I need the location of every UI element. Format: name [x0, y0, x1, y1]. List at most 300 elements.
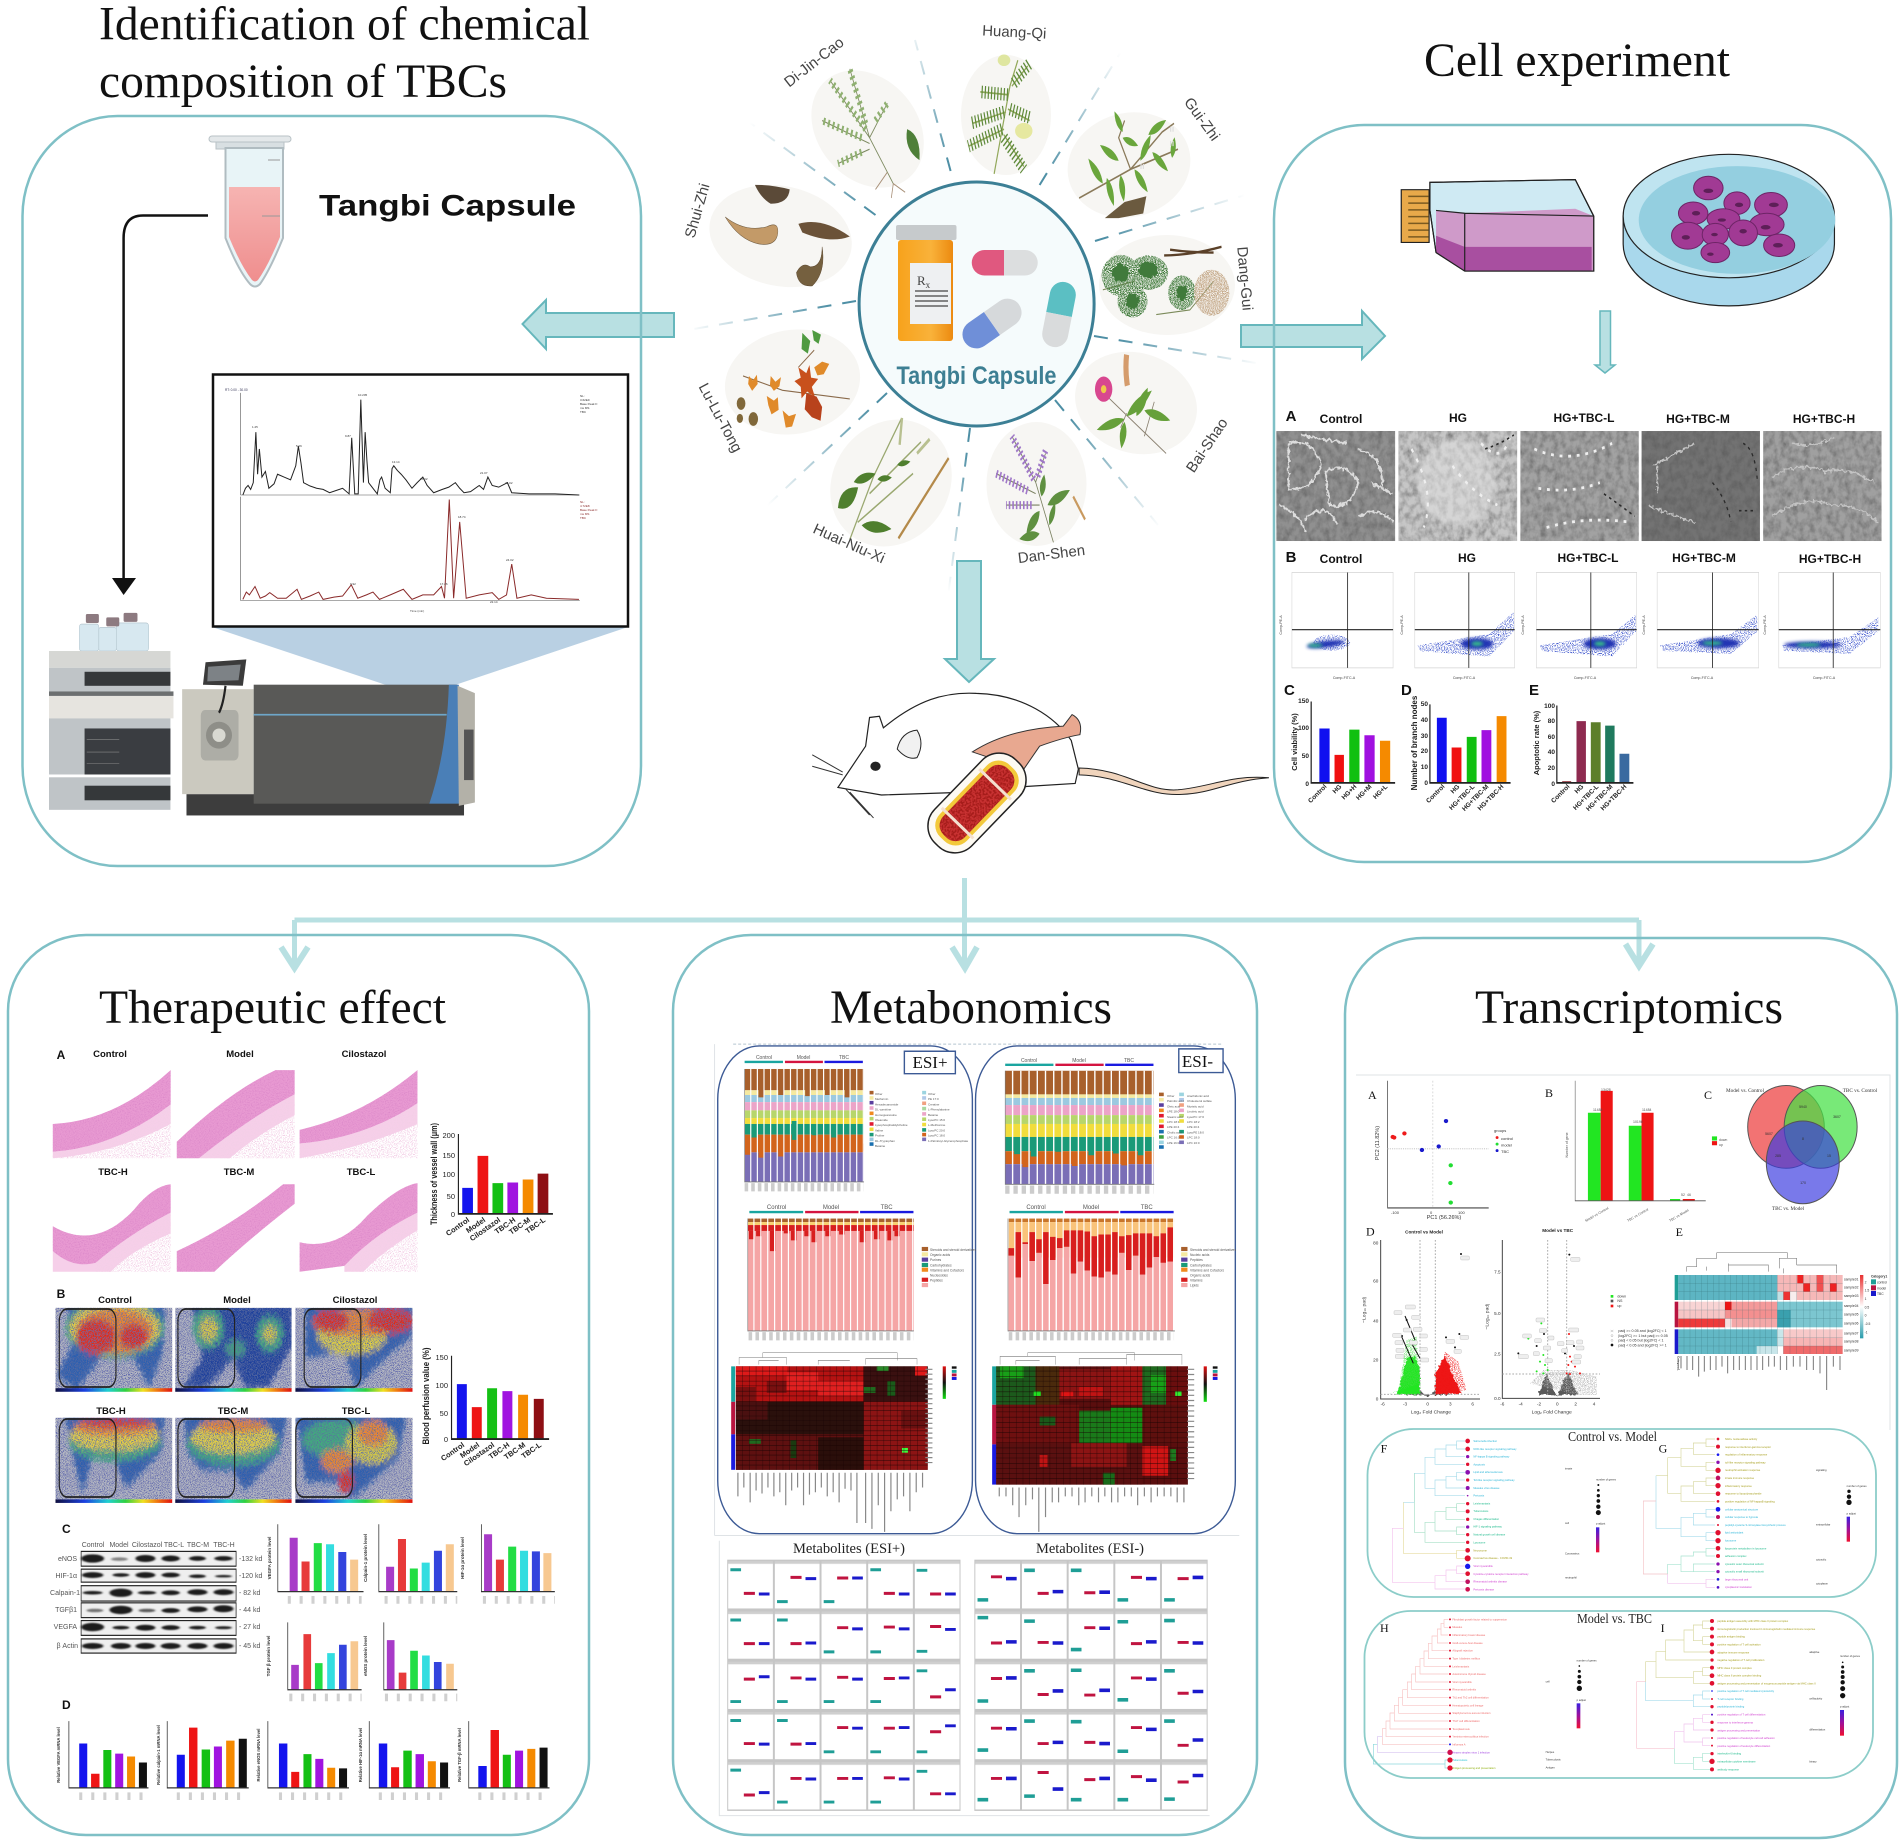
herb labels: Shui-Zhi	[682, 182, 714, 240]
heatmap: gene expression: sample06	[1844, 1321, 1859, 1325]
legend text: ESI+ metabolites: Oleamide	[875, 1118, 888, 1122]
chart C: cell viability: HG+M	[1355, 783, 1373, 802]
legend text: ESI+ metabolites: TBC	[839, 1055, 849, 1061]
panel A headings: HG+TBC-M	[1666, 412, 1730, 426]
legend text: ESI- metabolites: Oleic acid	[1167, 1104, 1181, 1108]
legend text: ESI- metabolites: Stearic acid	[1167, 1115, 1183, 1119]
chart: PCA: groups	[1494, 1128, 1506, 1133]
legend text: ESI- metabolites: Other	[1167, 1094, 1175, 1098]
chart: chromatogram: 9.92	[350, 582, 356, 586]
tree G: lipid antioxidant	[1725, 1531, 1744, 1535]
tree I: antigen processing and presentation of exogenous peptide antigen via MHC class II	[1717, 1682, 1816, 1686]
title: identification of chemical composition: Identification of chemical	[99, 0, 590, 50]
section A labels	[57, 1048, 386, 1178]
chart: blood perfusion value: Cilostazol	[462, 1440, 496, 1468]
panel A headings: HG	[1449, 411, 1467, 425]
icon: pill bottle: R	[917, 273, 926, 288]
tree G: cytoplasm	[1816, 1581, 1829, 1585]
western blot: -120 kd	[239, 1573, 262, 1580]
panel letters A B C: A	[1368, 1088, 1377, 1102]
legend text: ESI+ metabolites: Lysophosphatidylcholine	[875, 1123, 908, 1127]
tree H: Inflammatory bowel disease	[1452, 1633, 1486, 1637]
heatmap: gene expression: sample09	[1844, 1348, 1859, 1352]
box: Model vs. TBC enrichment	[1364, 1611, 1873, 1778]
stacked bars: ESI+ metabolites	[745, 1062, 864, 1187]
chart: chromatogram: 21.07	[480, 471, 488, 475]
charts D: mRNA levels: Relative HIF-1α mRNA level	[358, 1728, 363, 1782]
decorative spokes group	[676, 40, 1265, 591]
volcano: model vs TBC: -4	[1519, 1401, 1523, 1406]
chart: chromatogram: 10.205	[358, 393, 368, 397]
chart: thickness of vessel wall	[429, 1123, 553, 1243]
chart: thickness of vessel wall: 50	[447, 1192, 455, 1201]
chart: thickness of vessel wall: 100	[442, 1170, 455, 1179]
labels: ESI+ classes: Control	[767, 1205, 786, 1211]
volcano: model vs TBC: −Log₁₀ padj	[1485, 1304, 1491, 1330]
volcano: model vs TBC	[1485, 1228, 1600, 1415]
chart D: branch nodes: 40	[1421, 717, 1428, 724]
charts: protein levels: HIF-1α protein level	[460, 1537, 465, 1579]
panel A headings: HG+TBC-L	[1554, 411, 1614, 425]
icon: culture flask	[1401, 180, 1594, 271]
chart: differential gene counts	[1565, 1081, 1727, 1223]
heatmap: gene expression: -1	[1865, 1330, 1868, 1334]
legend: volcano: down	[1617, 1294, 1626, 1298]
title: metabolites ESI+: Metabolites (ESI+)	[793, 1541, 905, 1557]
legend text: ESI- metabolites: Control	[1021, 1058, 1037, 1064]
section B labels: Control	[98, 1295, 132, 1306]
flow plot axis labels: Comp-FITC-A	[1574, 676, 1597, 680]
legend text: ESI+ metabolites: Creatine	[928, 1102, 940, 1106]
frame around transcriptomics figure	[1356, 1075, 1890, 1430]
legend text: ESI+ metabolites: LysoPC 18:0	[928, 1134, 945, 1138]
chart D: branch nodes: HG+TBC-H	[1477, 783, 1506, 812]
tree G: lipoprotein metabolism in lysosome	[1725, 1546, 1767, 1550]
chart: venn diagram: TBC vs. Control	[1843, 1088, 1878, 1094]
herb labels: Dang-Gui	[1233, 246, 1256, 311]
tree F: Apoptosis	[1473, 1462, 1486, 1466]
tree I: positive regulation of T cell differentiation	[1717, 1713, 1766, 1717]
chart: thickness of vessel wall: Cilostazol	[468, 1215, 502, 1243]
chart: differential gene counts: 52	[1681, 1193, 1685, 1197]
volcano: control vs model: −Log₁₀ padj	[1361, 1297, 1367, 1323]
chart: PCA: model	[1501, 1142, 1512, 1148]
volcano: model vs TBC: 2	[1574, 1401, 1577, 1406]
flow plot axis labels	[1279, 615, 1836, 680]
heatmap: gene expression: sample05	[1844, 1312, 1859, 1316]
chart E: apoptotic rate: 40	[1548, 749, 1555, 756]
tree G: large ribosomal unit	[1725, 1577, 1748, 1581]
legend text: ESI+ metabolites: Model	[797, 1055, 810, 1061]
chart C: cell viability: HG+H	[1341, 783, 1359, 801]
tree I: T cell receptor binding	[1717, 1697, 1744, 1701]
heatmap: gene expression: Category1	[1676, 1356, 1680, 1371]
labels: ESI+ classes: Purines	[930, 1258, 942, 1262]
section A histology images	[53, 1070, 417, 1272]
chart: PCA: -100	[1391, 1210, 1400, 1215]
volcano: control vs model: Control vs Model	[1405, 1229, 1443, 1234]
volcano: model vs TBC: 0.0	[1494, 1396, 1501, 1401]
chart: chromatogram: ms MS	[580, 406, 589, 410]
section B labels	[57, 1287, 377, 1417]
stacked bars: ESI- classes	[1008, 1212, 1187, 1336]
flow plot axis labels: Comp-FITC-A	[1333, 676, 1356, 680]
chart: venn diagram: 170	[1800, 1181, 1806, 1185]
legend text: ESI+ metabolites: Proline	[875, 1134, 885, 1138]
panel: metabonomics	[673, 935, 1257, 1835]
western blot: Model	[109, 1542, 129, 1549]
legend text: ESI- metabolites: LPC 18:1	[1167, 1120, 1180, 1124]
charts: volcano plots and heatmap: E	[1676, 1225, 1683, 1239]
panel A headings	[1286, 408, 1855, 426]
title: identification of chemical composition: composition of TBCs	[99, 56, 507, 108]
chart: chromatogram: 9.87	[345, 434, 351, 438]
tree F	[1381, 1439, 1617, 1592]
labels: ESI- classes: Model	[1083, 1205, 1099, 1211]
tree F: NF-kappa B signaling pathway	[1473, 1455, 1510, 1459]
chart E: apoptotic rate	[1529, 682, 1633, 813]
tree G: adhesion complex	[1725, 1554, 1747, 1558]
chart C: cell viability: C	[1284, 682, 1295, 699]
tree F: Measles virus disease	[1473, 1486, 1500, 1490]
flow plot axis labels: Comp-FITC-A	[1453, 676, 1476, 680]
chart: chromatogram: Time (min)	[410, 609, 424, 613]
chart: differential gene counts: up	[1719, 1143, 1723, 1147]
volcano: control vs model: -6	[1381, 1401, 1385, 1406]
legend text: ESI+ metabolites: 1-Palmitoyl-Glycerophosphate	[928, 1139, 969, 1143]
tree F: Chagas differentiation	[1473, 1517, 1500, 1521]
chart: blood perfusion value: TBC-L	[520, 1440, 543, 1461]
legend: volcano	[1611, 1294, 1668, 1347]
herb labels: Bai-Shao	[1183, 415, 1232, 476]
chart: differential gene counts: Number of gene	[1565, 1132, 1569, 1158]
panel: cell experiment frame	[1274, 125, 1891, 862]
labels: ESI- classes: Lipids	[1190, 1284, 1199, 1288]
panel A headings: Control	[1320, 412, 1362, 426]
arrow: down to rat model	[945, 561, 994, 682]
tree I: extracellular cytokine membrane	[1717, 1759, 1756, 1763]
legend: volcano: NS	[1617, 1299, 1623, 1303]
tree I: negative regulation of T cell proliferation	[1717, 1658, 1765, 1662]
icon: sample tube	[209, 136, 291, 286]
charts: volcano plots and heatmap	[1361, 1224, 1887, 1415]
tree H: Staphylococcus aureus infection	[1452, 1711, 1491, 1715]
charts: protein levels: Calpain-1 protein level	[363, 1534, 368, 1582]
chart: venn diagram	[1726, 1086, 1878, 1212]
chart E: apoptotic rate: HG+TBC-M	[1585, 783, 1614, 813]
section A labels: TBC-H	[98, 1167, 128, 1178]
western blot: TBC-L	[164, 1542, 184, 1549]
tree I: differentiation	[1809, 1728, 1826, 1732]
tree I: peptide antigen binding	[1717, 1635, 1745, 1639]
chart C: cell viability: HG	[1332, 783, 1343, 795]
tree I: response to interferon-gamma	[1717, 1720, 1753, 1724]
charts D: mRNA levels: Relative calpain-1 mRNA level	[156, 1725, 161, 1785]
volcano: control vs model: Log₂ Fold Change	[1411, 1409, 1451, 1415]
chart: blood perfusion value: Model	[458, 1440, 481, 1460]
legend text: ESI- metabolites: LPC 18:0	[1187, 1136, 1200, 1140]
western blot: - 27 kd	[239, 1624, 261, 1631]
tree H: Yersinia enterocolitica infection	[1452, 1735, 1489, 1739]
chart E: apoptotic rate: HG+TBC-L	[1572, 783, 1600, 812]
tree G: regulation of inflammatory response	[1725, 1453, 1768, 1457]
chart: chromatogram: Base Peak F:	[580, 402, 598, 406]
tree H: Antigen	[1546, 1766, 1555, 1770]
volcano: control vs model: 40	[1373, 1318, 1379, 1323]
tree G: response to lipopolysaccharide	[1725, 1492, 1762, 1496]
icon: teal capsule	[1040, 280, 1078, 349]
small multiples: ESI+ metabolites	[727, 1560, 961, 1811]
stacked bars: ESI+ classes	[748, 1212, 928, 1336]
heading: Control vs. Model: Control vs. Model	[1568, 1430, 1657, 1445]
tree F: Pertussis	[1473, 1494, 1485, 1498]
flow plot axis labels: Comp-FITC-A	[1691, 676, 1714, 680]
legend text: ESI+ metabolites: LysoPC 15:0	[928, 1118, 945, 1122]
chart: PCA	[1375, 1081, 1513, 1221]
tree G: cellular response to hypoxia	[1725, 1515, 1758, 1519]
chart: chromatogram: 13.14	[392, 460, 400, 464]
chart: chromatogram: 24.02	[506, 558, 514, 562]
icon: liquid chromatography stack and mass spectrometer	[49, 613, 475, 815]
arrow: left to chemical identification	[522, 300, 674, 349]
chart: chromatogram: 1.25	[252, 425, 258, 429]
volcano: control vs model: 3	[1449, 1401, 1452, 1406]
tree I: number of genes	[1840, 1654, 1861, 1658]
section B labels: TBC-H	[96, 1406, 126, 1417]
chart D: branch nodes: 10	[1421, 764, 1428, 771]
labels ESI	[912, 1052, 1213, 1072]
chart D: branch nodes: 20	[1421, 748, 1428, 755]
herb: Dang-Gui	[1099, 235, 1235, 335]
tree F: Coronavirus	[1565, 1552, 1580, 1556]
tree H: Toxoplasmosis	[1452, 1727, 1470, 1731]
chart: venn diagram: 5940	[1799, 1105, 1807, 1109]
heatmap: gene expression: Category1	[1871, 1274, 1887, 1278]
chart E: apoptotic rate: 20	[1548, 765, 1555, 772]
arrow: right to cell experiment	[1241, 311, 1385, 359]
chart E: apoptotic rate: 60	[1548, 734, 1555, 741]
legend text: ESI- metabolites: LPC 16:0	[1187, 1141, 1200, 1145]
chart: flow cytometry plots	[1292, 572, 1880, 668]
volcano: model vs TBC: Log₂ Fold Change	[1532, 1409, 1572, 1415]
panel: chemical composition frame	[22, 116, 641, 866]
labels: ESI- classes: Carbohydrates	[1190, 1263, 1212, 1267]
chart: blood perfusion value: TBC-M	[502, 1440, 527, 1462]
chart: chromatogram: 3.62E9	[580, 398, 590, 402]
tree F: Pertussis disease	[1473, 1587, 1495, 1591]
chart D: branch nodes	[1401, 682, 1511, 813]
tree F: Toll-like receptor signaling pathway	[1473, 1478, 1515, 1482]
western blot: Cilostazol	[132, 1542, 163, 1549]
tree F: neutrophil	[1565, 1575, 1577, 1579]
tree G: signaling	[1816, 1468, 1827, 1472]
legend text: ESI- metabolites: LysoPE 18:0	[1187, 1130, 1204, 1134]
chart: differential gene counts: 11484	[1642, 1108, 1652, 1112]
chart: blood perfusion value	[421, 1348, 549, 1468]
tree F: Necrosome	[1473, 1548, 1487, 1552]
herb: Di-Jin-Cao	[788, 48, 947, 210]
tree H: cell	[1546, 1680, 1550, 1684]
legend text: ESI- metabolites: Arachidonic acid	[1187, 1094, 1209, 1098]
tree I: peptide antigen assembly with MHC class II protein complex	[1717, 1619, 1789, 1623]
chart: differential gene counts: TBC vs Model	[1668, 1208, 1690, 1223]
chart C: cell viability: Control	[1307, 783, 1329, 805]
flow plot axis labels: Comp-FITC-A	[1813, 676, 1836, 680]
heatmap: gene expression: sample04	[1844, 1304, 1859, 1308]
labels: ESI- classes: Peptides	[1190, 1258, 1203, 1262]
title: transcriptomics: Transcriptomics	[1475, 981, 1783, 1034]
chart: thickness of vessel wall: Control	[444, 1215, 471, 1238]
tree I: adaptive immune response	[1717, 1650, 1750, 1654]
chart: chromatogram	[213, 374, 628, 626]
chart: differential gene counts: 46	[1687, 1193, 1691, 1197]
legend text: ESI- metabolites	[1021, 1058, 1212, 1145]
western blot: VEGFA	[54, 1624, 77, 1631]
chart D: branch nodes: 50	[1421, 701, 1428, 708]
western blot	[50, 1522, 262, 1653]
legend: volcano: padj < 0.05 and |log2FC| >= 1	[1618, 1343, 1667, 1347]
western blot: eNOS	[58, 1556, 77, 1563]
labels: ESI+ classes: Organic acids	[930, 1253, 951, 1257]
western blot: β Actin	[56, 1643, 78, 1650]
tree H: Leishmaniasis	[1452, 1664, 1470, 1668]
legend text: ESI+ metabolites: Valine	[875, 1128, 883, 1132]
heatmap: gene expression: control	[1877, 1280, 1887, 1284]
tree H: Th17 cell differentiation	[1452, 1719, 1480, 1723]
central circle with medicines	[859, 182, 1094, 426]
charts D: mRNA levels: D	[62, 1698, 71, 1712]
legend text: ESI+ metabolites: DL-carnitine	[875, 1108, 892, 1112]
herb labels: Huai-Niu-Xi	[810, 521, 887, 567]
chart: PCA: PC1 (56.26%)	[1427, 1215, 1461, 1221]
tree I: MHC class II protein complex binding	[1717, 1674, 1762, 1678]
tree H: p adjust	[1577, 1698, 1586, 1702]
title: metabolites ESI-: Metabolites (ESI-)	[1036, 1541, 1144, 1557]
tree G: peptidyl-cysteine S-nitrosylase biosynthetic process	[1725, 1523, 1786, 1527]
chart: chromatogram: ms MS	[580, 512, 589, 516]
chart: chromatogram: Base Peak F:	[580, 508, 598, 512]
section B labels: TBC-M	[218, 1406, 248, 1417]
chart: chromatogram: 17.26	[440, 582, 448, 586]
icon: pill bottle	[896, 225, 956, 341]
tree G: cytosolic	[1816, 1558, 1827, 1562]
legend text: ESI- metabolites: LPC 18:2	[1187, 1120, 1200, 1124]
chart D: branch nodes: 30	[1421, 733, 1428, 740]
chart: venn diagram: 8	[1802, 1137, 1804, 1141]
western blot: TBC-M	[187, 1542, 209, 1549]
legend text: ESI- metabolites: LysoPC 17:0	[1187, 1115, 1204, 1119]
chart: thickness of vessel wall: 200	[442, 1131, 455, 1140]
heatmap: ESI-	[992, 1353, 1218, 1532]
tree H: Measles	[1452, 1625, 1463, 1629]
western blot: TGFβ1	[55, 1607, 77, 1614]
western blot: Calpain-1	[50, 1590, 80, 1597]
charts: protein levels	[266, 1524, 555, 1697]
chart E: apoptotic rate: HG+TBC-H	[1600, 783, 1629, 812]
chart: venn diagram: 15	[1827, 1154, 1831, 1158]
western blot: TBC-H	[213, 1542, 235, 1549]
western blot: - 44 kd	[239, 1607, 261, 1614]
chart E: apoptotic rate: Apoptotic rate (%)	[1532, 710, 1541, 775]
panel B headings	[1286, 549, 1861, 566]
tree H: H	[1380, 1621, 1389, 1635]
tree F: HIF-1 signaling pathway	[1473, 1525, 1502, 1529]
labels: ESI- classes: TBC	[1141, 1205, 1153, 1211]
chart D: branch nodes: Control	[1425, 783, 1447, 805]
labels ESI: ESI-	[1182, 1052, 1213, 1071]
legend text: ESI+ metabolites: Control	[756, 1055, 772, 1061]
tree H: Tuberculosis	[1546, 1758, 1561, 1762]
icon: pill bottle: x	[926, 280, 931, 290]
tree H: Herpes	[1546, 1750, 1555, 1754]
illustration: rat with bone section	[812, 693, 1269, 818]
flow plot axis labels: Comp-PE-A	[1521, 615, 1525, 635]
tree H: Type I diabetes mellitus	[1452, 1656, 1481, 1660]
charts: volcano plots and heatmap: D	[1366, 1224, 1375, 1238]
title: metabonomics: Metabonomics	[830, 981, 1112, 1034]
panel letters A B C: B	[1545, 1086, 1553, 1100]
chart: thickness of vessel wall: TBC-L	[524, 1215, 547, 1236]
chart: chromatogram: 15.02	[420, 477, 428, 481]
tree G: extracellular	[1816, 1523, 1830, 1527]
volcano: model vs TBC: -6	[1500, 1401, 1505, 1406]
tree H: Th1 and Th2 cell differentiation	[1452, 1696, 1489, 1700]
legend text: ESI- metabolites: Cholesterol sulfate	[1187, 1099, 1212, 1103]
herb: Bai-Shao	[1062, 336, 1210, 470]
panel A headings: HG+TBC-H	[1793, 412, 1855, 426]
legend text: ESI- metabolites: Palmitic acid	[1167, 1099, 1184, 1103]
tree G: number of genes	[1847, 1484, 1867, 1488]
chart D: branch nodes: D	[1401, 682, 1412, 699]
heading: Model vs. TBC: Model vs. TBC	[1577, 1612, 1652, 1627]
tree G	[1643, 1437, 1867, 1589]
title: cell experiment: Cell experiment	[1424, 35, 1730, 87]
tree H: Tuberculosis	[1452, 1758, 1468, 1762]
legend text: ESI- metabolites: Model	[1072, 1058, 1086, 1064]
legend text: ESI+ metabolites: L-Phenylalanine	[928, 1108, 950, 1112]
heatmap: gene expression: 0.5	[1865, 1305, 1869, 1309]
icon: blue capsule	[957, 293, 1027, 354]
title: identification of chemical composition	[99, 0, 590, 108]
labels: ESI+ classes: Nucleosides	[930, 1274, 948, 1278]
tree G: innate immune response	[1725, 1476, 1755, 1480]
herb labels	[682, 22, 1256, 567]
legend text: ESI- metabolites: LPE 16:0	[1167, 1141, 1180, 1145]
chart: chromatogram: RT: 0.00 - 30.00	[225, 388, 248, 392]
tree F: Leishmaniasis	[1473, 1501, 1491, 1505]
chart C: cell viability: 100	[1298, 725, 1309, 732]
volcano: model vs TBC: 5.0	[1494, 1311, 1501, 1316]
tree F: Viral myocarditis	[1473, 1564, 1493, 1568]
legend: volcano: padj < 0.05 but |log2FC| < 1	[1618, 1339, 1664, 1343]
panel A headings: A	[1286, 408, 1297, 425]
chart: blood perfusion value: Blood perfusion value (%)	[421, 1348, 431, 1444]
panel B headings: B	[1286, 549, 1297, 566]
tree I: p adjust	[1840, 1705, 1850, 1709]
chart E: apoptotic rate: Control	[1550, 783, 1572, 805]
volcano: control vs model: 80	[1373, 1240, 1379, 1245]
chart: venn diagram: 285	[1775, 1154, 1781, 1158]
section A labels: Model	[226, 1049, 254, 1060]
labels: ESI- classes: Organic acids	[1190, 1274, 1211, 1278]
chart: venn diagram: Model vs. Control	[1726, 1088, 1765, 1094]
legend text: ESI+ metabolites: Betaine	[928, 1113, 939, 1117]
chart C: cell viability: Cell viability (%)	[1290, 713, 1299, 771]
section A labels: TBC-L	[347, 1167, 375, 1178]
labels: ESI+ classes: Vitamins and Cofactors	[930, 1268, 964, 1272]
charts: protein levels: VEGFA protein level	[267, 1537, 272, 1579]
charts D: mRNA levels: Relative VEGFA mRNA level	[56, 1727, 61, 1783]
